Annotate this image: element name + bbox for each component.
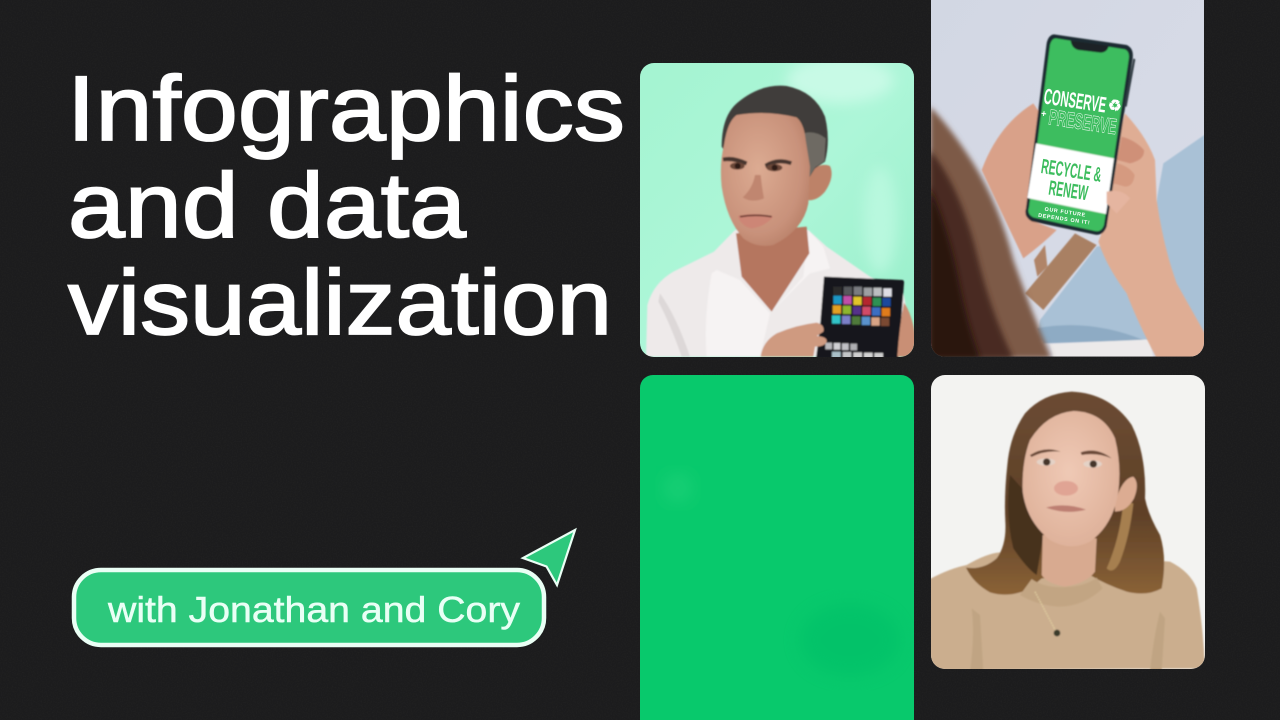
title: Infographics [67,58,625,160]
necklace [1035,592,1060,636]
brows [723,157,792,168]
notch [1071,41,1109,53]
phone screen text: ♻ [1107,97,1123,116]
jeans fold shadow [1037,325,1143,343]
phone screen text [1038,84,1123,227]
icon: cursor arrow [523,530,575,585]
panel: phone photo illustration [930,0,1207,360]
hair [966,392,1164,595]
title [67,58,625,354]
eyes [730,162,782,171]
right hand back [1098,113,1207,358]
title: visualization [68,252,612,354]
color checker card [816,277,904,360]
hand right [897,303,917,357]
face [721,113,810,246]
pill label: with Jonathan and Cory [107,589,520,630]
phone screen text: + [1040,108,1048,119]
nose shadow [743,175,764,201]
phone screen text: RENEW [1047,177,1090,205]
nose [1054,481,1078,496]
chair wood [1025,233,1097,310]
hair [930,107,1052,358]
brows [1030,449,1112,458]
sweater collar [1020,578,1103,607]
neck [736,227,809,312]
phone screen text: CONSERVE [1042,84,1108,118]
sweater [930,552,1205,672]
phone screen text: PRESERVE [1047,105,1118,139]
hair [722,86,828,177]
title: and data [68,155,467,257]
panel: man photo illustration [640,57,917,360]
fingers over phone [1107,137,1144,213]
neck [1042,535,1097,587]
ear [807,165,832,200]
phone screen [1028,38,1129,231]
white bottom cloth [1050,339,1153,358]
eyes [1037,458,1102,468]
mouth [738,214,773,228]
panel: solid green block [640,375,914,720]
phone body [1025,34,1135,235]
mouth [1046,505,1086,512]
presenters badge [74,530,575,645]
face [1023,411,1119,546]
phone screen text: DEPENDS ON IT! [1038,213,1091,227]
hand left [761,323,827,357]
phone screen text: RECYCLE & [1040,155,1103,187]
panel: woman photo illustration [930,375,1207,675]
white band [1027,143,1114,214]
pill label [74,570,544,645]
left hand [982,103,1057,258]
shirt [646,230,917,357]
blue jeans [1037,133,1207,341]
phone screen text: OUR FUTURE [1044,207,1086,219]
ear [1115,477,1137,512]
